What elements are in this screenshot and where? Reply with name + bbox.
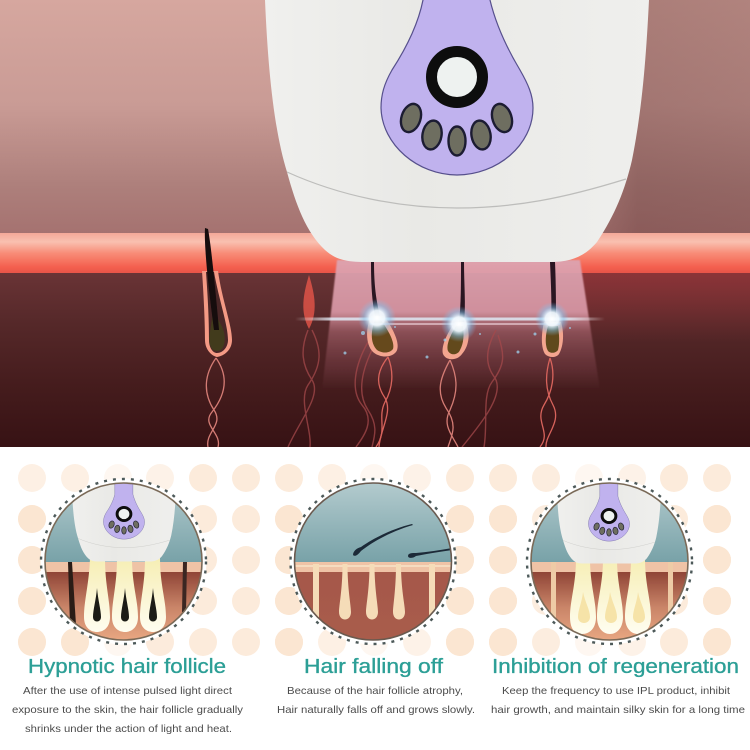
heading: hypnotic hair follicle: Hypnotic hair follicle	[28, 656, 226, 678]
text block: hypnotic hair follicle: exposure to the skin, the hair follicle gradually	[12, 704, 244, 716]
treated follicle 2	[440, 262, 469, 447]
text block: hair falling off: Because of the hair follicle atrophy,	[287, 685, 463, 697]
circle illustration: hair falling off	[290, 478, 460, 644]
text block: inhibition of regeneration	[491, 685, 745, 716]
text block: hair falling off: Hair naturally falls off and grows slowly.	[277, 704, 475, 716]
background above skin	[0, 0, 750, 234]
dotted background pattern	[18, 464, 731, 656]
heading: hair falling off: Hair falling off	[304, 656, 443, 678]
circle illustration: hypnotic hair follicle	[40, 478, 210, 644]
faded follicles and vessels	[288, 275, 503, 447]
treated follicle 3	[540, 262, 563, 447]
glowing red skin band	[0, 233, 750, 273]
text block: hypnotic hair follicle: shrinks under the action of light and heat.	[25, 723, 232, 735]
heading: inhibition of regeneration: Inhibition of regeneration	[492, 656, 739, 678]
treated follicle 1	[367, 262, 398, 447]
text block: hypnotic hair follicle: After the use of intense pulsed light direct	[23, 685, 232, 697]
dermis layer	[0, 272, 750, 447]
text block: hypnotic hair follicle	[12, 685, 244, 735]
text block: inhibition of regeneration: Keep the frequency to use IPL product, inhibit	[502, 685, 730, 697]
circle illustration: inhibition of regeneration	[526, 478, 696, 644]
device: white IPL handset with lavender control panel	[262, 0, 652, 262]
text block: inhibition of regeneration: hair growth, and maintain silky skin for a long time	[491, 704, 745, 716]
flare line and light sparks	[295, 299, 605, 358]
panel: skin cross-section hero	[0, 0, 750, 447]
light beam under device	[322, 260, 600, 390]
text block: hair falling off	[277, 685, 475, 716]
hair follicle left (untreated)	[202, 228, 232, 447]
